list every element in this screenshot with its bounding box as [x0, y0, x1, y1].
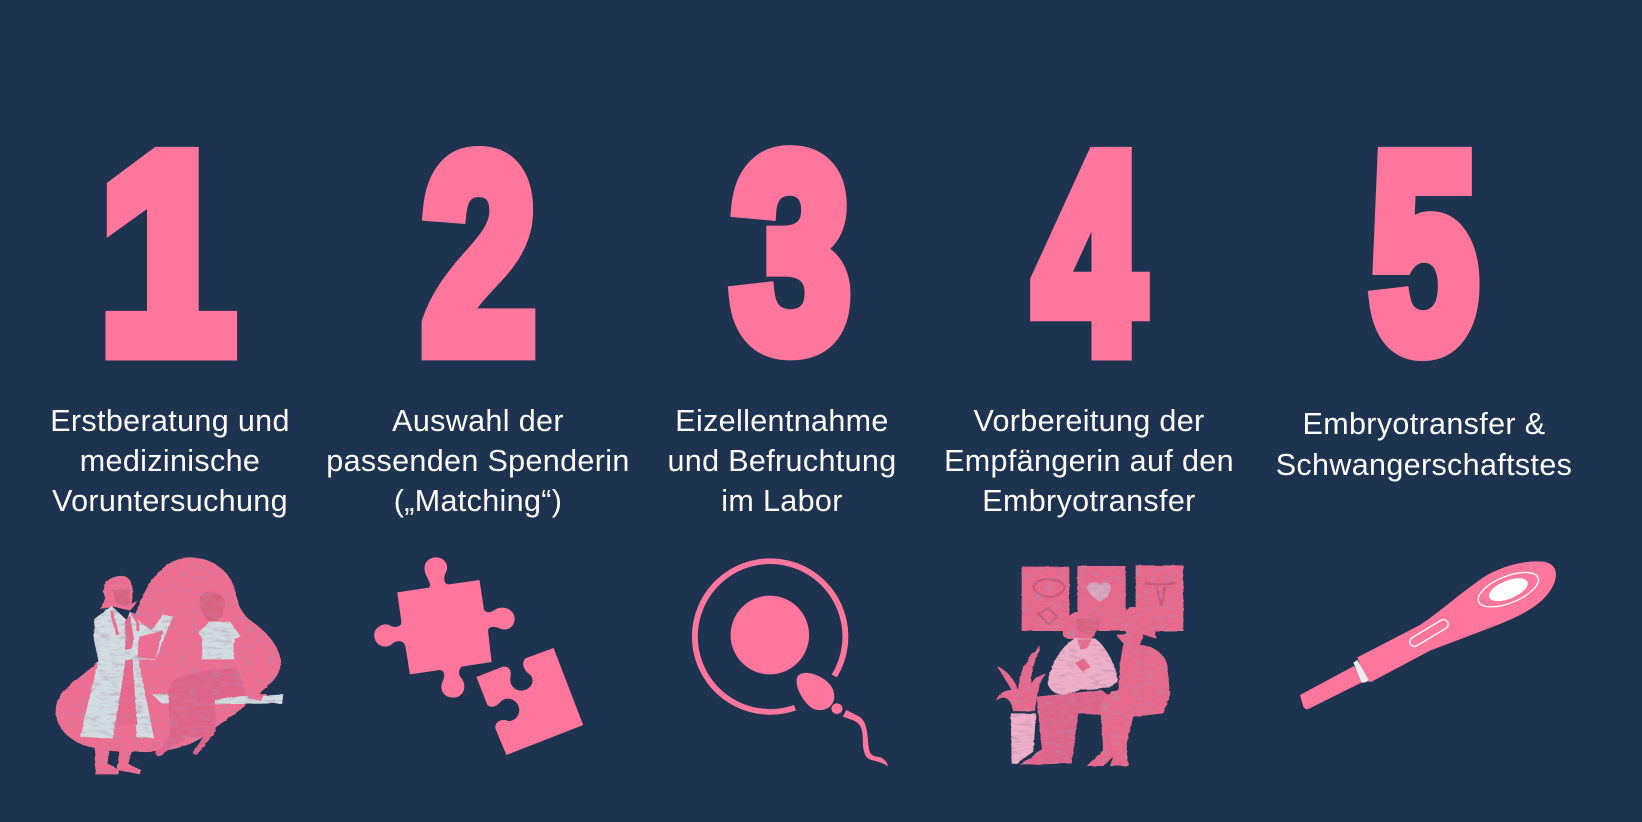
test ring — [1353, 660, 1369, 683]
step 1 text: Voruntersuchung — [52, 484, 288, 518]
egg nucleus — [731, 596, 809, 674]
egg outer ring — [695, 561, 845, 712]
step 2 text: Auswahl der — [392, 404, 564, 438]
step 3 number: 3 — [732, 100, 850, 406]
test result window — [1474, 565, 1543, 614]
icon: egg cell and sperm — [695, 561, 888, 767]
step 1 text — [50, 404, 290, 518]
step 4 number: 4 — [1034, 97, 1144, 410]
test body — [1357, 561, 1556, 682]
step 2 text: passenden Spenderin — [326, 444, 630, 478]
step 5 number: 5 — [1370, 97, 1478, 407]
step 4 text: Embryotransfer — [982, 484, 1196, 518]
sperm head — [797, 673, 834, 710]
icon: pregnancy test — [1300, 561, 1556, 709]
sperm neck dot — [831, 703, 843, 714]
step 2 text — [326, 404, 630, 518]
step 3 text: und Befruchtung — [667, 444, 897, 478]
step 3 text: Eizellentnahme — [675, 404, 889, 438]
step 1 text: Erstberatung und — [50, 404, 290, 438]
step 4 text: Vorbereitung der — [973, 404, 1205, 438]
test small slot — [1408, 618, 1450, 648]
step 5 text — [1276, 407, 1572, 482]
step 1 number: 1 — [99, 96, 235, 410]
test handle — [1300, 666, 1363, 709]
step 2 text: („Matching“) — [394, 484, 562, 518]
step 3 text: im Labor — [721, 484, 843, 518]
icon: doctor and patient illustration — [56, 557, 284, 774]
step 4 text: Empfängerin auf den — [944, 444, 1234, 478]
step 1 text: medizinische — [80, 444, 260, 478]
puzzle piece bottom — [476, 648, 583, 755]
step 2 number: 2 — [422, 100, 536, 409]
icon: puzzle pieces — [374, 557, 583, 755]
step 4 text — [944, 404, 1234, 518]
step 3 text — [667, 404, 897, 518]
sperm tail — [843, 710, 888, 767]
puzzle piece top — [374, 557, 515, 698]
step 5 text: Embryotransfer & — [1303, 407, 1545, 441]
icon: couple in clinic illustration — [996, 565, 1183, 766]
step 5 text: Schwangerschaftstes — [1276, 448, 1572, 482]
